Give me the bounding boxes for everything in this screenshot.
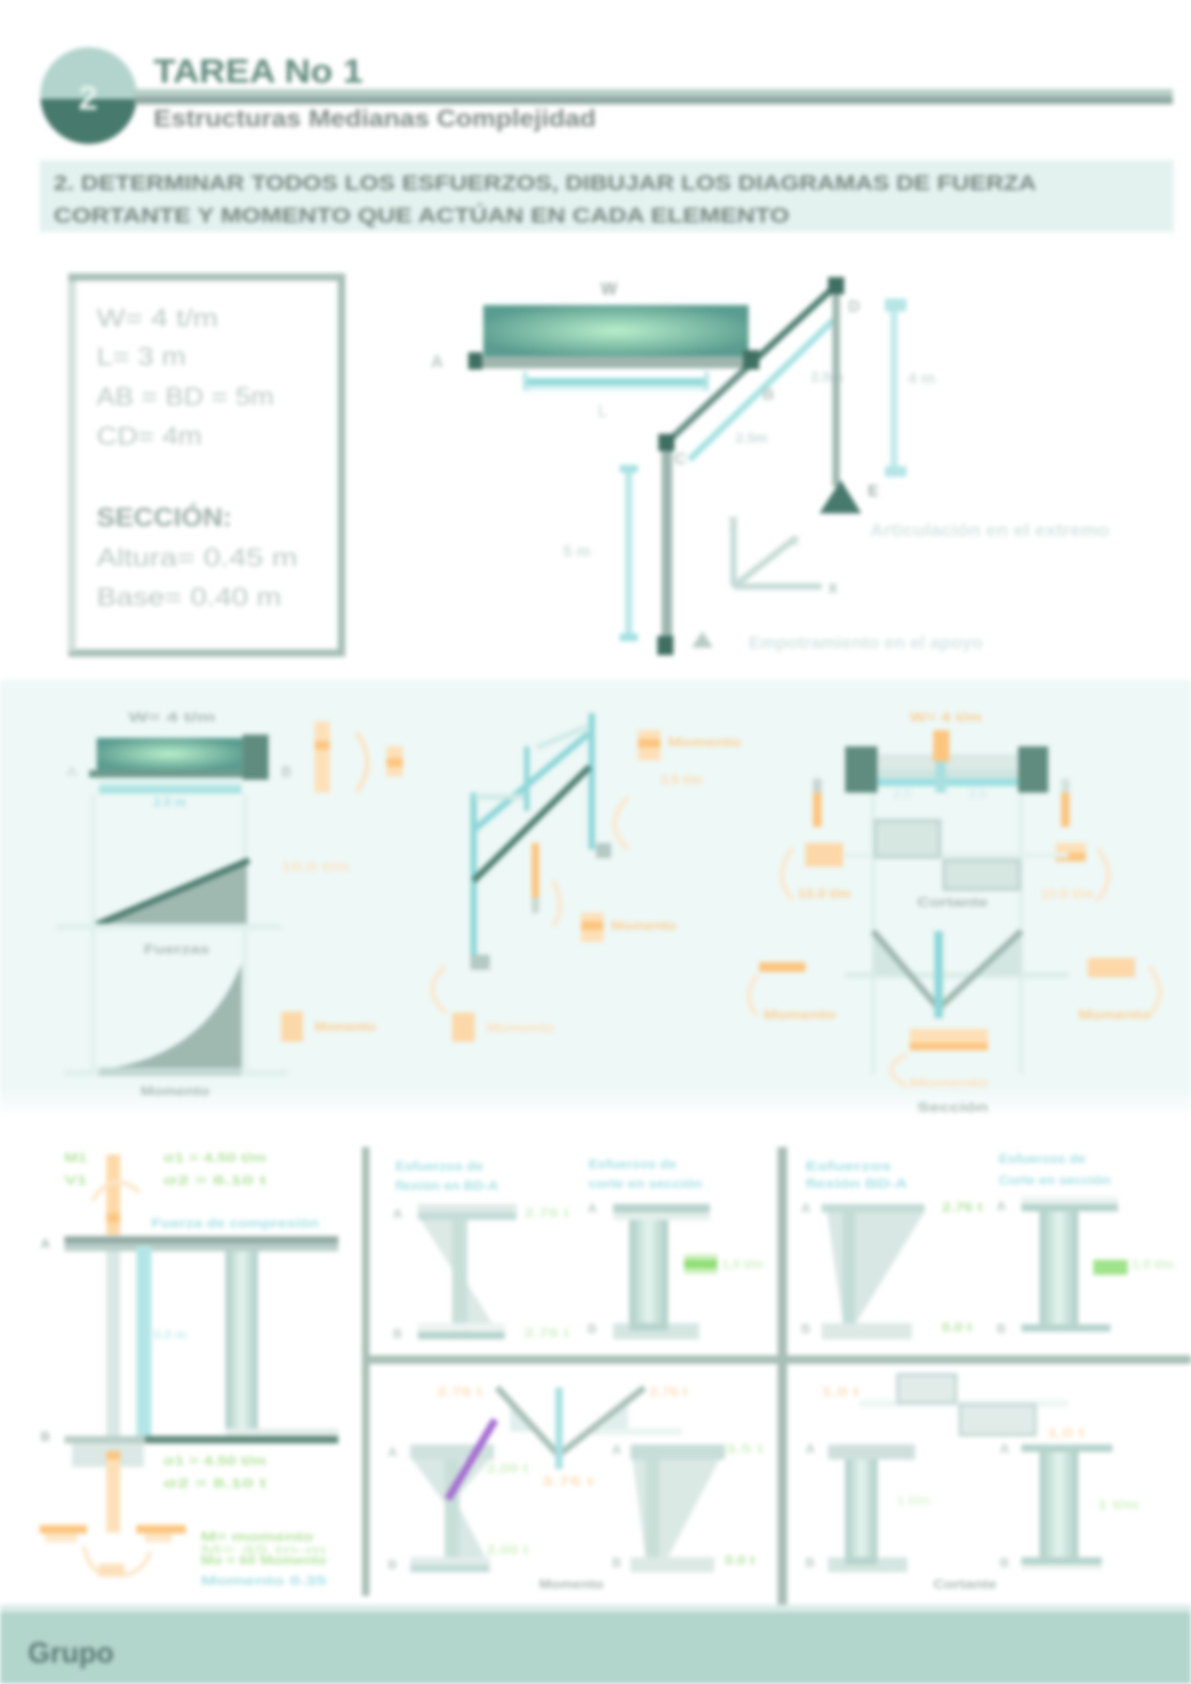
force arrow bbox=[315, 722, 330, 793]
axes bbox=[728, 510, 838, 597]
heading left: flexión BD-A bbox=[805, 1176, 907, 1191]
beam label: W= 4 t/m bbox=[128, 710, 215, 725]
span dimension bbox=[99, 781, 242, 810]
panel: data: W= 4 t/m bbox=[97, 306, 218, 333]
end letters bbox=[67, 763, 291, 780]
orange values: 3.76 t bbox=[541, 1473, 595, 1488]
dividers bbox=[362, 1147, 1191, 1607]
section letters: B bbox=[805, 1555, 815, 1570]
moment diagram bbox=[99, 963, 242, 1070]
axes: y bbox=[728, 510, 738, 530]
node labels: E bbox=[868, 482, 879, 500]
reaction right bbox=[1061, 779, 1070, 827]
values 5 bbox=[486, 1460, 529, 1557]
heading right: Esfuerzos de bbox=[999, 1151, 1086, 1166]
callout center bbox=[581, 913, 677, 942]
orange values: 1.0 t bbox=[1047, 1425, 1086, 1440]
callout top right bbox=[638, 730, 741, 760]
section letters: A bbox=[805, 1441, 815, 1456]
callouts moment: Momento bbox=[764, 1007, 836, 1022]
section letters: A bbox=[612, 1442, 621, 1457]
heading left: Esfuerzos bbox=[805, 1159, 891, 1174]
caption: pinned support: Articulación en el extremo bbox=[870, 520, 1109, 540]
panel: data: L= 3 m bbox=[97, 344, 186, 371]
values 3: 2.76 t bbox=[942, 1199, 984, 1214]
section 7 bbox=[828, 1444, 915, 1572]
values 6 bbox=[725, 1441, 765, 1568]
orange values: 2.76 t bbox=[437, 1384, 483, 1399]
callout max moment bbox=[891, 1029, 988, 1090]
values 6: 3.5 t bbox=[725, 1441, 765, 1456]
section 5 bbox=[410, 1444, 494, 1572]
dimension 5m bbox=[563, 465, 638, 641]
guides bbox=[873, 793, 1021, 1074]
end node bbox=[243, 735, 268, 780]
heading left: flexión en BD-A bbox=[395, 1178, 498, 1193]
load arrow bbox=[532, 843, 539, 913]
panel: data: Base= 0.40 m bbox=[97, 585, 281, 612]
span labels: 2.5 bbox=[969, 786, 987, 801]
green labels top bbox=[64, 1150, 267, 1188]
green labels bottom: σ2 = 8.10 t bbox=[163, 1475, 267, 1490]
arc left bbox=[432, 967, 446, 1013]
end letters: A bbox=[67, 763, 77, 780]
callout left: 10.0 t/m bbox=[798, 886, 851, 901]
load arrow bbox=[933, 730, 949, 761]
mark bbox=[555, 1388, 563, 1469]
inclined member bbox=[667, 286, 836, 442]
axes: z bbox=[793, 533, 800, 550]
panel: stress B bbox=[801, 1151, 1174, 1339]
diagrams: beam BD bbox=[749, 710, 1160, 1115]
section letters: A bbox=[801, 1201, 810, 1216]
instruction banner bbox=[40, 160, 1174, 232]
moment fill bbox=[873, 931, 1021, 975]
axes: x bbox=[828, 577, 838, 597]
callout bottom: Momento bbox=[486, 1020, 554, 1035]
arc center bbox=[553, 881, 560, 926]
panel: data bbox=[69, 277, 342, 653]
dimension 5m: 5 m bbox=[563, 542, 591, 560]
orange lower bbox=[106, 1451, 120, 1533]
section letters: B bbox=[612, 1555, 621, 1570]
i-section bbox=[226, 1251, 258, 1436]
end blocks bbox=[845, 746, 1048, 793]
section letters: A bbox=[41, 1236, 50, 1251]
section letters: B bbox=[393, 1326, 402, 1341]
left column bbox=[662, 445, 672, 644]
section 6 bbox=[630, 1444, 725, 1572]
green labels top: M1 bbox=[64, 1150, 87, 1165]
shear diagram bbox=[99, 860, 247, 924]
green notes: Mo = 60 Momento bbox=[201, 1553, 327, 1568]
title: TAREA No 1 bbox=[154, 54, 363, 91]
dimension 4m: 4 m bbox=[908, 369, 935, 387]
section letters: B bbox=[801, 1321, 810, 1336]
shear label: Cortante bbox=[917, 894, 988, 909]
span mark bbox=[935, 761, 946, 793]
heading right: corte en sección bbox=[589, 1176, 702, 1191]
moment fill bbox=[510, 1405, 628, 1432]
section 4 bbox=[1021, 1196, 1118, 1332]
panel: data: AB = BD = 5m bbox=[97, 384, 274, 411]
beam AB bbox=[476, 357, 752, 368]
footer: Grupo bbox=[28, 1637, 114, 1669]
moment axis bbox=[64, 1068, 288, 1076]
orange arc bbox=[84, 1547, 150, 1577]
section letters: A bbox=[587, 1201, 597, 1216]
green notes: M= momento bbox=[201, 1529, 314, 1544]
callout max moment: Momento bbox=[910, 1075, 988, 1090]
shear value: 10.0 t/m bbox=[281, 859, 349, 874]
purple line bbox=[448, 1420, 495, 1499]
section 2 bbox=[613, 1204, 710, 1339]
header: number badge bbox=[40, 47, 137, 144]
dimension L: L bbox=[598, 401, 607, 421]
label A: A bbox=[431, 351, 443, 371]
orange values: 1.0 t bbox=[822, 1384, 860, 1399]
orange horizontals bbox=[40, 1525, 186, 1542]
callout left bbox=[782, 843, 851, 901]
panel: data: Altura= 0.45 m bbox=[97, 545, 297, 572]
values 5: 2.00 t bbox=[486, 1542, 529, 1557]
green value 2: 1.0 t/m bbox=[722, 1256, 764, 1271]
top label: W= 4 t/m bbox=[910, 710, 982, 725]
heading left bbox=[395, 1159, 498, 1193]
vertical member CD bbox=[832, 288, 840, 487]
moment callout: Momento bbox=[315, 1019, 376, 1034]
cyan diagonal bbox=[475, 734, 589, 829]
label: Sección bbox=[917, 1100, 988, 1115]
callout top right: Momento bbox=[668, 734, 741, 749]
distributed load bbox=[483, 305, 749, 357]
green labels top: σ2 = 8.10 t bbox=[163, 1173, 267, 1188]
column value: 5.0 m bbox=[154, 1327, 187, 1342]
values 5: 2.00 t bbox=[486, 1460, 529, 1475]
section letters bbox=[393, 1201, 597, 1341]
section letters: B bbox=[997, 1321, 1006, 1336]
support: roller bbox=[692, 632, 713, 648]
orange values: 2.76 t bbox=[650, 1384, 688, 1399]
panel: stress C bbox=[388, 1384, 765, 1591]
columns bbox=[106, 1251, 120, 1436]
section 1 bbox=[418, 1204, 517, 1339]
footer bbox=[0, 1604, 1191, 1684]
instruction banner: CORTANTE Y MOMENTO QUE ACTÚAN EN CADA ELEMENTO bbox=[54, 202, 789, 227]
cyan note: Momento 0.35 bbox=[201, 1573, 326, 1588]
section 8 bbox=[1021, 1444, 1113, 1570]
green labels bottom: σ1 = 4.50 t/m bbox=[163, 1453, 266, 1468]
top beam bbox=[64, 1236, 338, 1251]
diagrams: beam AB bbox=[56, 710, 403, 1098]
caption: fixed support: Empotramiento en el apoyo bbox=[749, 633, 983, 653]
inclined dimension: 2.5m bbox=[811, 368, 843, 384]
callout moment right bbox=[1078, 958, 1160, 1022]
dimension 4m bbox=[885, 299, 935, 477]
green value 4: 1.0 t/m bbox=[1132, 1256, 1174, 1271]
values 3: 0.0 t bbox=[942, 1320, 973, 1335]
green value 4 bbox=[1093, 1256, 1174, 1275]
span labels: 2.5 bbox=[894, 786, 911, 801]
panel: data: CD= 4m bbox=[97, 424, 202, 451]
header rule bbox=[134, 89, 1173, 104]
node labels: C bbox=[674, 450, 686, 468]
values 3 bbox=[942, 1199, 984, 1335]
callout moment right: Momento bbox=[1078, 1007, 1150, 1022]
caption: Momento bbox=[539, 1576, 604, 1591]
callout bottom bbox=[452, 1013, 554, 1042]
support: pinned bbox=[819, 480, 861, 513]
section letters bbox=[41, 1236, 50, 1444]
heading right: Corte en sección bbox=[999, 1173, 1111, 1188]
node labels: D bbox=[848, 297, 860, 315]
node labels: B bbox=[762, 386, 774, 404]
section letters: B bbox=[1000, 1555, 1009, 1570]
panel: stress A bbox=[393, 1156, 764, 1341]
green labels bottom bbox=[163, 1453, 267, 1490]
caption: Cortante bbox=[933, 1576, 997, 1591]
moment mark bbox=[934, 931, 943, 1018]
bracket bbox=[357, 732, 367, 792]
value 8: 1 t/m bbox=[1098, 1497, 1139, 1512]
beam bbox=[89, 770, 253, 778]
instruction banner: 2. DETERMINAR TODOS LOS ESFUERZOS, DIBUJAR LOS DIAGRAMAS DE FUERZA bbox=[54, 171, 1036, 195]
heading left: Esfuerzos de bbox=[395, 1159, 483, 1174]
shear blocks bbox=[875, 821, 1019, 889]
green labels top: V1 bbox=[64, 1173, 87, 1188]
values 1: 2.76 t bbox=[524, 1325, 570, 1340]
node labels bbox=[674, 297, 879, 500]
dark diagonal bbox=[474, 767, 590, 881]
interior strut bbox=[524, 746, 529, 811]
beam body bbox=[877, 754, 1018, 786]
heading right bbox=[999, 1151, 1111, 1188]
callout right bbox=[1041, 843, 1108, 901]
moment axis bbox=[845, 972, 1069, 978]
dimension L bbox=[523, 372, 709, 421]
subtitle: Estructuras Medianas Complejidad bbox=[154, 107, 596, 133]
callouts moment bbox=[749, 962, 836, 1022]
axis bbox=[593, 1428, 682, 1435]
reaction left bbox=[813, 779, 822, 827]
compression label: Fuerza de compresión bbox=[151, 1216, 319, 1231]
values 1 bbox=[524, 1205, 570, 1340]
foot bbox=[72, 1443, 144, 1467]
shear axis bbox=[56, 924, 281, 930]
end nodes bbox=[470, 843, 611, 970]
orange values bbox=[822, 1384, 1086, 1440]
callout center: Momento bbox=[611, 918, 677, 933]
section letters bbox=[388, 1442, 621, 1572]
inclined dimension bbox=[689, 320, 843, 460]
section letters: A bbox=[997, 1198, 1006, 1213]
values 1: 2.76 t bbox=[524, 1205, 570, 1220]
column bbox=[470, 793, 477, 960]
section letters: A bbox=[388, 1444, 397, 1459]
end letters: B bbox=[281, 763, 291, 780]
callout right: 10.0 t/m bbox=[1041, 886, 1093, 901]
moment V bbox=[873, 931, 1021, 1008]
shear axis bbox=[845, 853, 1069, 858]
section letters: A bbox=[393, 1206, 402, 1221]
values 6: 0.0 t bbox=[725, 1553, 756, 1568]
column section bbox=[40, 1150, 338, 1588]
panel: solution band bbox=[0, 680, 1191, 1118]
inclined dimension: 2.5m bbox=[736, 429, 767, 445]
section letters: A bbox=[1000, 1441, 1009, 1456]
section 3 bbox=[822, 1204, 925, 1339]
green notes: M= 45 tn-m bbox=[201, 1542, 326, 1557]
reaction bbox=[387, 746, 403, 776]
frame diagram bbox=[431, 277, 1109, 655]
orange values bbox=[437, 1384, 688, 1488]
load bbox=[97, 738, 243, 770]
span dimension: 2.5 m bbox=[153, 795, 186, 810]
heading left bbox=[805, 1159, 907, 1191]
axis bbox=[859, 1400, 1069, 1407]
nodes bbox=[468, 277, 844, 655]
green notes bbox=[201, 1529, 327, 1568]
section letters bbox=[805, 1441, 1009, 1570]
section letters: B bbox=[41, 1429, 50, 1444]
span labels bbox=[894, 786, 987, 801]
upper column bbox=[589, 713, 595, 850]
section letters bbox=[801, 1198, 1006, 1336]
panel: stress D bbox=[805, 1375, 1139, 1591]
value 7: 1 t/m bbox=[897, 1493, 930, 1508]
bottom beam bbox=[64, 1428, 338, 1443]
diagrams: frame forces bbox=[432, 713, 741, 1042]
orange top bbox=[92, 1155, 140, 1235]
value label: 3.5 t/m bbox=[660, 772, 702, 787]
shear blocks bbox=[898, 1375, 1035, 1435]
section letters: B bbox=[587, 1321, 597, 1336]
moment V bbox=[497, 1388, 644, 1455]
arc right bbox=[615, 797, 628, 850]
shear label: Fuerzas bbox=[144, 942, 209, 957]
light dimension ticks bbox=[475, 726, 589, 797]
green value 2 bbox=[684, 1254, 764, 1274]
green labels top: σ1 = 4.50 t/m bbox=[163, 1150, 266, 1165]
heading right bbox=[589, 1156, 702, 1191]
compression bar bbox=[136, 1246, 151, 1436]
heading right: Esfuerzos de bbox=[589, 1156, 677, 1171]
header: number badge: 2 bbox=[79, 80, 98, 118]
section letters: B bbox=[388, 1557, 397, 1572]
panel: data: SECCIÓN: bbox=[97, 502, 232, 532]
moment callout bbox=[281, 1012, 376, 1042]
moment label: Momento bbox=[141, 1083, 210, 1098]
label W: W bbox=[601, 278, 618, 298]
